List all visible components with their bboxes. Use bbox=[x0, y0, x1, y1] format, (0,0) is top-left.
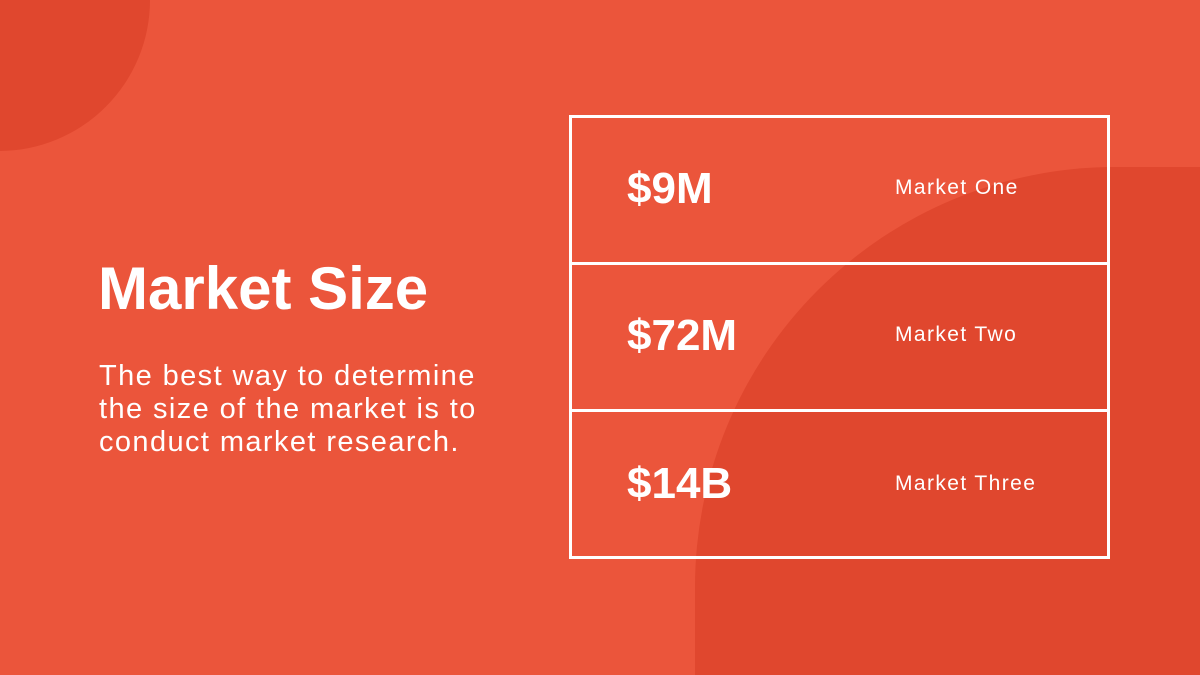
table of market values bbox=[569, 115, 1110, 559]
row: market three bbox=[569, 409, 1110, 559]
row: market two: Market Two bbox=[895, 323, 1017, 346]
description text: The best way to determine the size of the market is to conduct market research. bbox=[99, 360, 477, 458]
row: market two: $72M bbox=[627, 311, 737, 360]
row: market two bbox=[569, 262, 1110, 412]
row: market one: $9M bbox=[627, 164, 713, 213]
title: Market Size bbox=[98, 255, 428, 322]
row: market three: $14B bbox=[627, 459, 732, 508]
row: market one: Market One bbox=[895, 176, 1019, 199]
row: market three: Market Three bbox=[895, 472, 1036, 495]
row: market one bbox=[569, 115, 1110, 265]
